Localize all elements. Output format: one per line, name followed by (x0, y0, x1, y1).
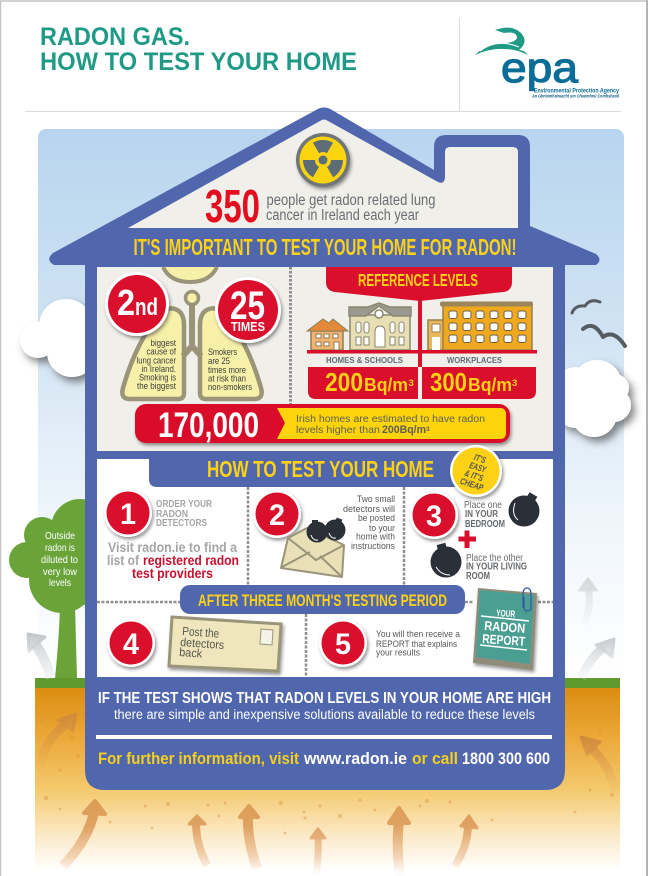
badge: 2nd: nd (135, 294, 158, 321)
step 1: test providers (132, 565, 213, 581)
step 1: registered radon (143, 552, 239, 568)
house outline (49, 108, 600, 790)
callout: 170,000 homes: 170,000 (158, 406, 259, 445)
ground: soil (35, 688, 620, 870)
badge: 2nd: 2 (117, 282, 135, 323)
icon: detector living room (430, 543, 462, 578)
step 3: IN YOUR LIVING (466, 562, 527, 572)
badge: easy and cheap: EASY (468, 460, 488, 475)
step 5: your results (376, 648, 420, 658)
tree (9, 499, 109, 678)
callout: 170,000 homes: levels higher than (296, 424, 380, 436)
icon: school (349, 303, 411, 350)
title (40, 23, 357, 76)
icon: postcard: detectors (180, 635, 225, 652)
badge: 25 times (215, 277, 281, 343)
step 2 (253, 490, 395, 577)
value: 200: 200 (325, 367, 363, 397)
tree text: diluted to (41, 554, 78, 566)
lung text right: at risk than (208, 374, 246, 384)
icon: radon report (473, 588, 537, 670)
step 2: to your (369, 523, 395, 534)
heading: how to test your home (149, 456, 455, 487)
badge: 2nd (105, 272, 169, 336)
step 5 (319, 588, 537, 670)
icon: radiation symbol (296, 133, 350, 187)
cloud left (20, 299, 97, 377)
banner: reference levels (326, 267, 512, 301)
step 1: list of (107, 552, 139, 568)
lung text right (208, 347, 252, 392)
icon: radon report: RADON (484, 618, 526, 636)
lung text left: the biggest (137, 381, 176, 391)
text: further information (98, 750, 550, 768)
value: 200: Bq/m (364, 375, 408, 395)
text: if the test shows (98, 690, 551, 722)
text: further information: For further information, visit (98, 750, 299, 768)
logo: epa: Environmental Protection Agency (534, 88, 619, 94)
icon: radon report: REPORT (482, 631, 526, 649)
badge: easy and cheap: IT'S (473, 452, 487, 465)
badge: 25 times: TIMES (231, 320, 265, 334)
text: if the test shows: IF THE TEST SHOWS THAT RADON LEVELS IN YOUR HOME ARE HIGH (98, 690, 551, 707)
step 3: BEDROOM (465, 519, 505, 530)
callout: 170,000 homes: 200Bq/m (382, 424, 426, 436)
step 5: You will then receive a (376, 629, 461, 640)
step 3: 3 (426, 500, 442, 533)
step 3: ROOM (466, 571, 490, 582)
tree text (41, 530, 78, 589)
badge: easy and cheap: CHEAP (459, 476, 485, 493)
title: RADON GAS. (40, 23, 190, 51)
icon: small house (307, 319, 348, 350)
step 4 (107, 617, 281, 671)
arrow: grey upper right (580, 579, 596, 625)
step 4: 4 (123, 628, 139, 661)
tree text: Outside (45, 530, 75, 542)
step 2: be posted (358, 513, 395, 524)
arrows: rising from soil (63, 801, 477, 876)
label: workplaces: WORKPLACES (447, 355, 502, 365)
arrow: grey right (581, 639, 614, 678)
title: HOW TO TEST YOUR HOME (40, 48, 357, 76)
logo: epa (475, 28, 620, 99)
step 2: instructions (351, 541, 395, 552)
lung text left: Smoking is (139, 372, 176, 382)
lung text left: biggest (150, 338, 176, 348)
callout: 170,000 homes: 3 (426, 426, 430, 433)
tree text: very low (43, 566, 77, 578)
heading: after three months (180, 585, 465, 614)
value: 300: 300 (430, 367, 467, 397)
badge: 25 times: 25 (230, 284, 265, 328)
value: 300: 3 (512, 378, 517, 389)
cloud right (557, 360, 631, 437)
icon: postcard: Post the (182, 624, 220, 641)
logo: epa: epa (501, 44, 579, 91)
step 5: 5 (335, 628, 351, 661)
attic panel (128, 120, 518, 232)
value: 300 (422, 367, 536, 399)
icon: postcard (169, 617, 281, 671)
icon: workplace (428, 302, 533, 350)
icon: detector bedroom (508, 492, 540, 526)
arrow: grey left (28, 634, 51, 678)
badge: easy and cheap (450, 445, 502, 497)
step 1 (104, 489, 239, 581)
value: 200: 3 (408, 378, 414, 389)
step 2: Two small (357, 494, 395, 505)
badge: easy and cheap: & IT'S (463, 468, 485, 483)
lung text right: Smokers (208, 347, 237, 357)
value: 200 (308, 367, 418, 399)
logo: epa: An Ghníomhaireacht um Chaomhnú Comhshaoil (531, 94, 620, 98)
icon: detectors (306, 518, 346, 542)
statistic: 350: 350 (205, 180, 260, 232)
text: further information: or call (412, 750, 458, 768)
step 1: ORDER YOUR (156, 498, 212, 510)
lung text left: lung cancer (136, 356, 176, 366)
lung text left (136, 338, 176, 391)
statistic: 350: cancer in Ireland each year (266, 207, 419, 224)
label: homes and schools: HOMES & SCHOOLS (326, 355, 403, 365)
statistic: 350: people get radon related lung (266, 192, 436, 209)
step 1: DETECTORS (156, 517, 207, 529)
tree text: levels (49, 577, 71, 589)
text: if the test shows: there are simple and inexpensive solutions available to reduce these levels (114, 707, 535, 722)
ground: grass (35, 678, 620, 688)
icon: radon report: YOUR (496, 608, 516, 620)
step 3: Place the other (466, 553, 524, 564)
tree text: radon is (45, 542, 75, 554)
step 2: home with (356, 532, 395, 542)
value: 300: Bq/m (468, 375, 512, 395)
step 3 (410, 491, 540, 582)
step 1: RADON (156, 508, 188, 520)
panel: lungs and reference levels (97, 267, 553, 451)
heading: how to test your home: HOW TO TEST YOUR HOME (207, 456, 434, 482)
step 1: 1 (120, 498, 136, 531)
step 2: 2 (269, 499, 285, 532)
icon: postcard: back (179, 645, 204, 661)
step 2: detectors will (343, 504, 395, 515)
lung text left: cause of (146, 346, 176, 356)
icon: lungs (122, 267, 262, 399)
sky background (38, 129, 624, 678)
panel: how to test (97, 445, 553, 677)
statistic: 350 (205, 180, 436, 232)
text: further information: www.radon.ie (303, 750, 407, 768)
step 1: Visit radon.ie to find a (108, 539, 237, 555)
step 3: IN YOUR (465, 509, 499, 520)
icon: birds (572, 301, 625, 346)
icon: plus (458, 530, 476, 548)
lung text right: are 25 (208, 356, 230, 366)
arrow: soil left (41, 714, 76, 768)
step 3: Place one (464, 500, 502, 511)
text: further information: 1800 300 600 (462, 750, 550, 768)
callout: 170,000 homes (135, 404, 510, 445)
lung text right: times more (208, 365, 246, 375)
lung text right: non-smokers (208, 382, 252, 392)
lung text left: in Ireland. (142, 364, 176, 374)
step 5: REPORT that explains (376, 639, 457, 650)
heading: after three months: AFTER THREE MONTH'S TESTING PERIOD (198, 592, 447, 610)
callout: 170,000 homes: Irish homes are estimated to have radon (296, 413, 485, 425)
arrow: soil right (581, 737, 616, 795)
icon: envelope (281, 528, 344, 577)
soil specks (40, 698, 614, 834)
banner: reference levels: REFERENCE LEVELS (358, 270, 478, 290)
